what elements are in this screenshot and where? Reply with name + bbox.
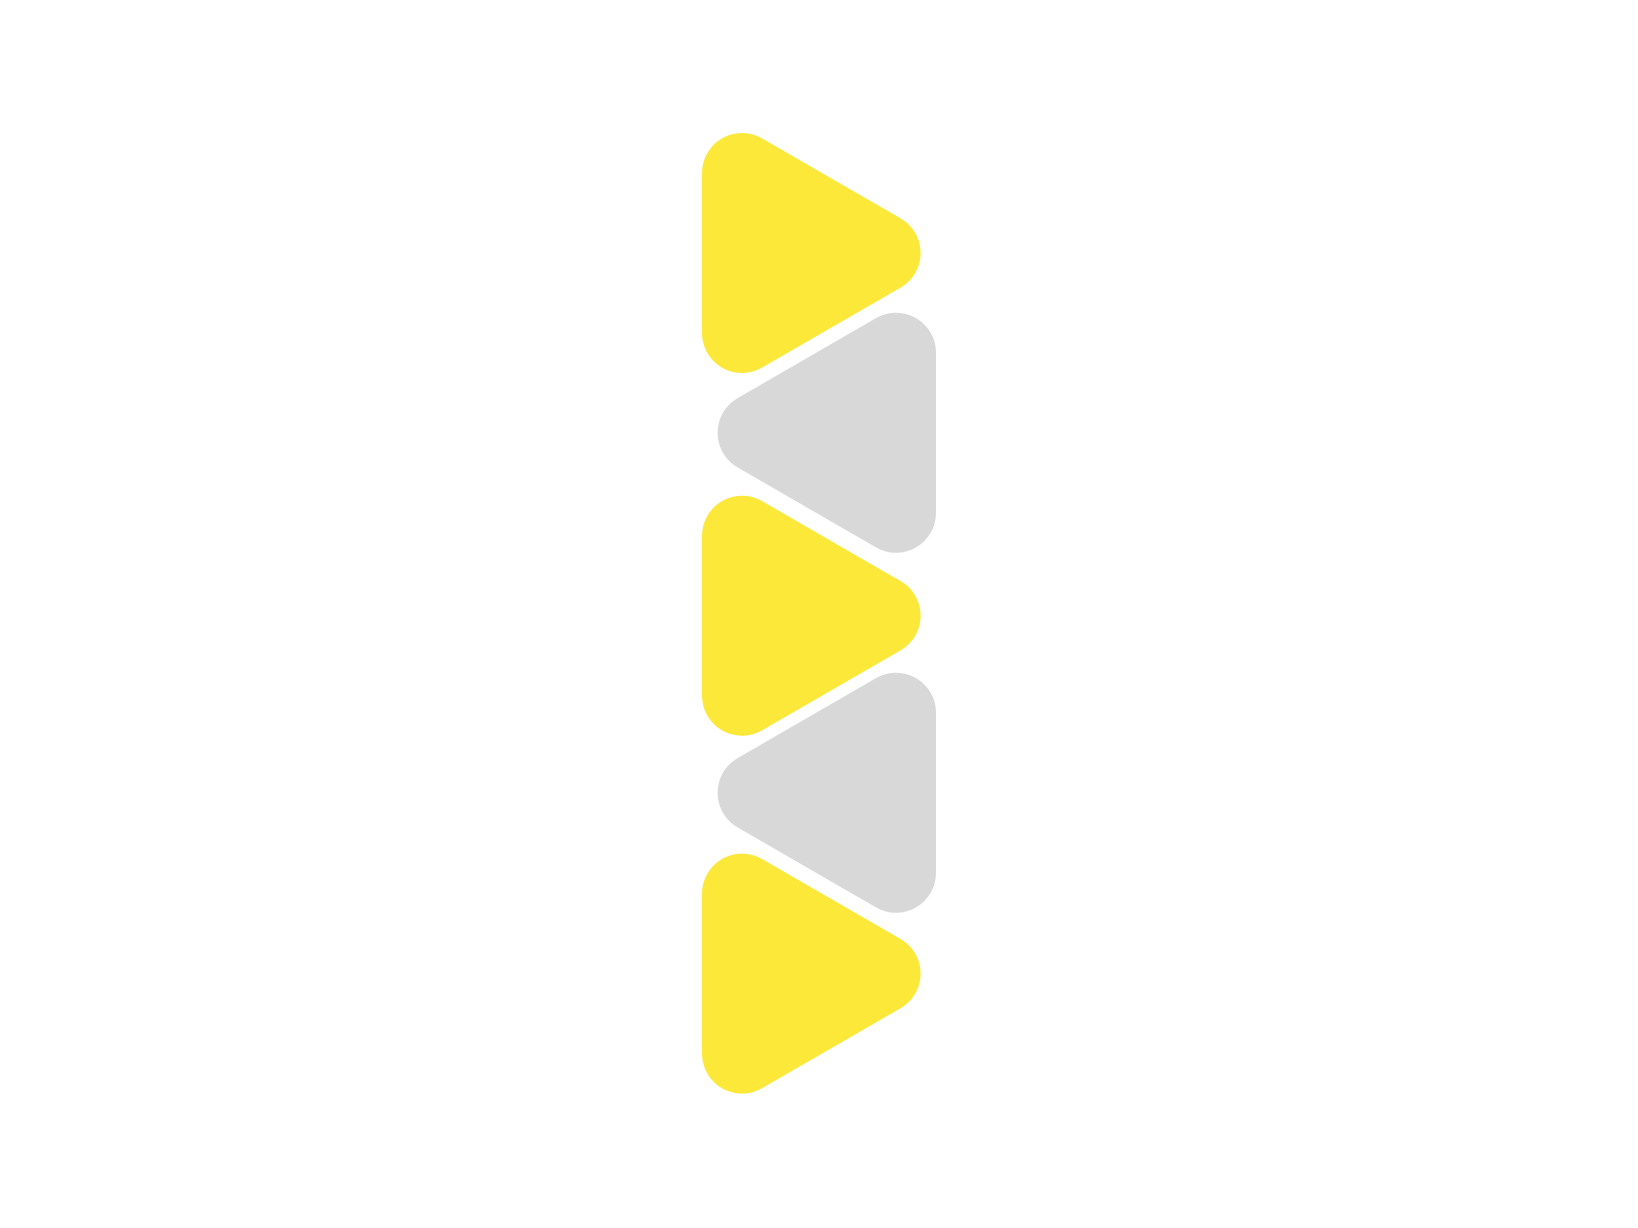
triangle 4: grey, pointing left	[758, 713, 896, 873]
triangle 2: grey, pointing left	[758, 353, 896, 513]
triangle 1: yellow, pointing right	[742, 173, 881, 333]
triangle 5: yellow, pointing right	[742, 894, 881, 1054]
triangle 3: yellow, pointing right	[742, 536, 881, 696]
